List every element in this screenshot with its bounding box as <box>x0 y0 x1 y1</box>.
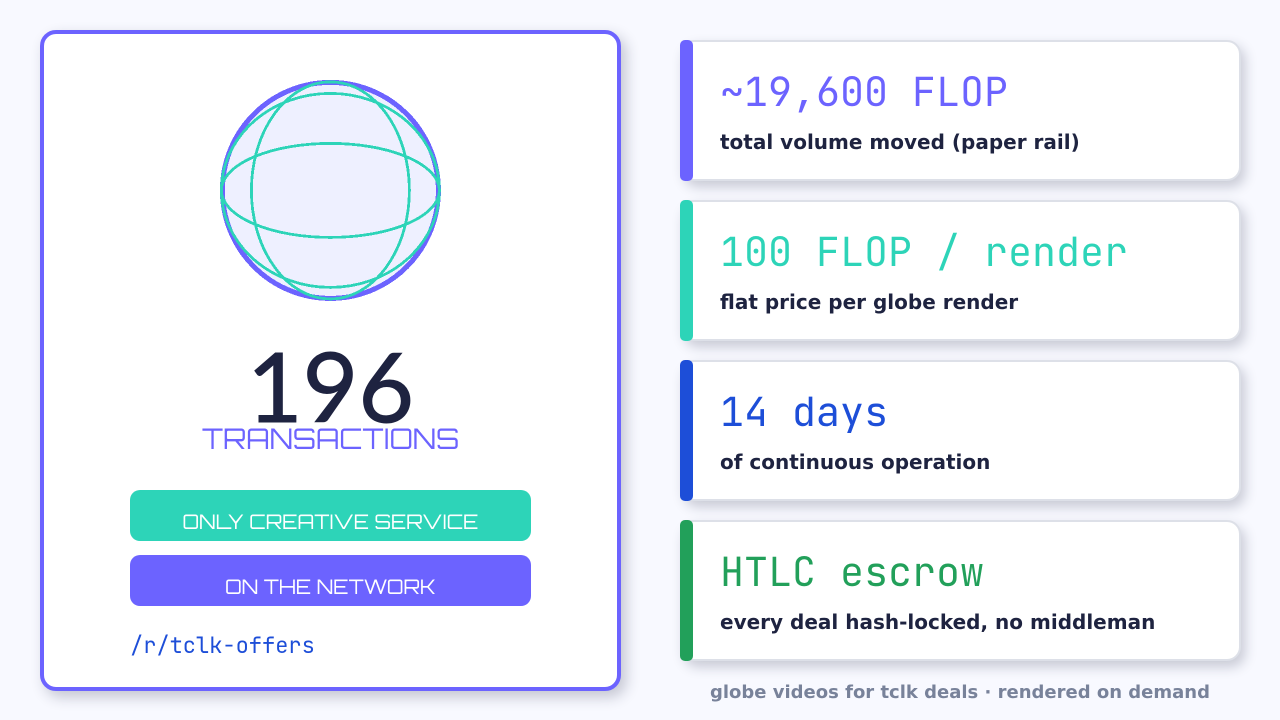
panel: escrow <box>680 520 1241 661</box>
panel: price <box>680 200 1241 341</box>
caption: volume: total volume moved (paper rail) <box>720 130 1080 154</box>
stat: duration: 14 days <box>720 385 888 438</box>
icon: wireframe globe <box>220 80 441 301</box>
caption: duration: of continuous operation <box>720 450 990 474</box>
link text: /r/tclk-offers <box>130 631 315 660</box>
caption: price: flat price per globe render <box>720 290 1018 314</box>
panel: duration <box>680 360 1241 501</box>
footer note: globe videos for tclk deals · rendered on demand <box>710 682 1210 703</box>
big number and label: 196 transactions: TRANSACTIONS <box>202 421 459 456</box>
accent bar: teal <box>680 200 693 341</box>
badge: on the network <box>130 555 531 606</box>
stat: price: 100 FLOP / render <box>720 225 1128 278</box>
stat: escrow: HTLC escrow <box>720 545 984 598</box>
accent bar: green <box>680 520 693 661</box>
accent bar: purple <box>680 40 693 181</box>
badge text: only creative service: ONLY CREATIVE SERVICE <box>182 509 478 534</box>
caption: escrow: every deal hash-locked, no middleman <box>720 610 1155 634</box>
big number and label: 196 transactions <box>202 335 459 456</box>
badge: only creative service <box>130 490 531 541</box>
badge text: on the network: ON THE NETWORK <box>225 574 436 599</box>
panel: total volume <box>680 40 1241 181</box>
stat: volume: ~19,600 FLOP <box>720 65 1008 118</box>
accent bar: blue <box>680 360 693 501</box>
panel: transactions <box>40 30 621 691</box>
